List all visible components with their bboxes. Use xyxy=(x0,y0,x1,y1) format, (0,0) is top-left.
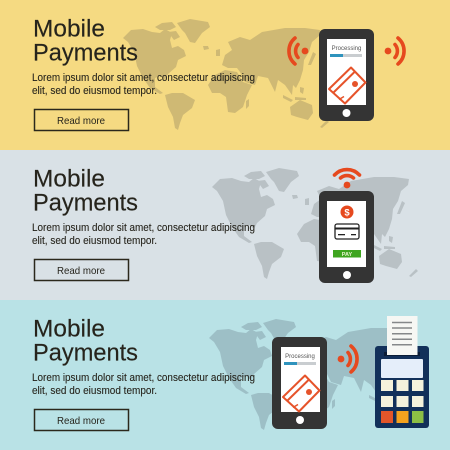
phone: processing payment: Processing xyxy=(285,354,315,360)
card terminal xyxy=(375,316,429,428)
icon: credit card xyxy=(283,376,320,412)
title: grey panel: Mobile xyxy=(33,166,105,192)
world map: yellow panel xyxy=(123,19,329,130)
icon: dollar coin: $ xyxy=(344,208,350,218)
phone: pay screen xyxy=(319,191,374,283)
phone: processing payment: Processing xyxy=(332,46,361,52)
icon: wifi signal left xyxy=(289,38,308,64)
button: read more: Read more xyxy=(57,415,105,427)
phone: processing payment xyxy=(319,29,374,121)
panel: teal banner xyxy=(0,300,450,450)
title: teal panel xyxy=(33,316,138,366)
icon: wifi signal right xyxy=(385,38,404,64)
title: grey panel: Payments xyxy=(33,190,138,216)
icon: bank card xyxy=(335,224,359,239)
button: read more xyxy=(34,110,128,130)
title: teal panel: Payments xyxy=(33,340,138,366)
panel: yellow banner xyxy=(0,0,450,150)
body text: teal panel xyxy=(32,372,255,397)
body text: yellow panel xyxy=(32,72,255,97)
receipt xyxy=(387,316,418,355)
body text: yellow panel: Lorem ipsum dolor sit amet, consectetur adipiscing xyxy=(32,72,255,84)
icon: credit card xyxy=(329,68,366,104)
title: yellow panel xyxy=(33,16,138,66)
button: read more xyxy=(34,260,128,280)
button: pay: PAY xyxy=(342,252,353,258)
title: yellow panel: Mobile xyxy=(33,16,105,42)
body text: yellow panel: elit, sed do eiusmod tempor. xyxy=(32,85,157,97)
terminal screen xyxy=(381,359,423,378)
phone: processing payment xyxy=(272,337,327,429)
body text: teal panel: Lorem ipsum dolor sit amet, consectetur adipiscing xyxy=(32,372,255,384)
world map: teal panel xyxy=(209,319,415,430)
body text: grey panel: elit, sed do eiusmod tempor. xyxy=(32,235,157,247)
icon: wifi signal xyxy=(338,346,357,372)
panel: grey banner xyxy=(0,150,450,300)
icon: wifi signal top xyxy=(334,170,360,188)
world map: grey panel xyxy=(212,168,418,279)
button: read more: Read more xyxy=(57,265,105,277)
keypad xyxy=(381,380,424,423)
body text: teal panel: elit, sed do eiusmod tempor. xyxy=(32,385,157,397)
button: read more xyxy=(34,410,128,430)
title: teal panel: Mobile xyxy=(33,316,105,342)
body text: grey panel xyxy=(32,222,255,247)
body text: grey panel: Lorem ipsum dolor sit amet, consectetur adipiscing xyxy=(32,222,255,234)
button: read more: Read more xyxy=(57,115,105,127)
title: yellow panel: Payments xyxy=(33,40,138,66)
title: grey panel xyxy=(33,166,138,216)
